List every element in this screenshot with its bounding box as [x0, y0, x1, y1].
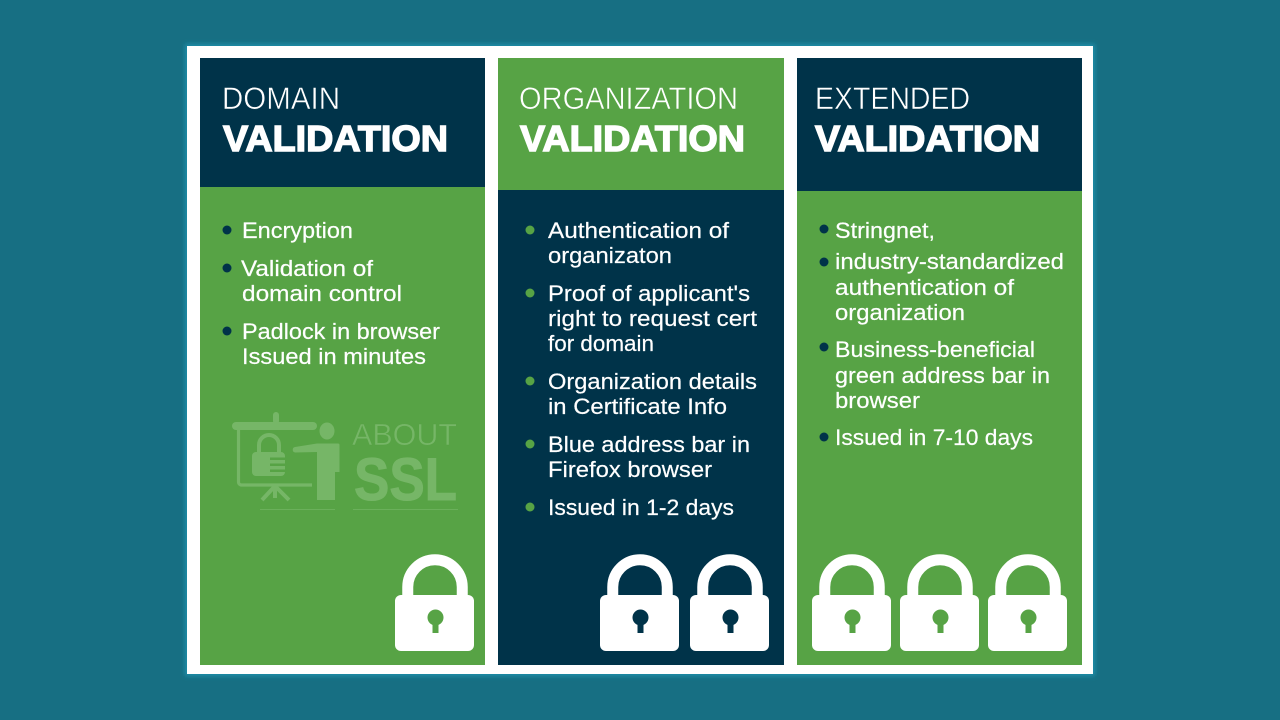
- feature list: organization validation: Authentication of: [548, 218, 730, 243]
- icon: padlock 3 of 3: [988, 560, 1067, 651]
- icon: presenter with padlock board: [232, 412, 340, 500]
- panel: extended validation: [797, 58, 1082, 665]
- feature list: organization validation: for domain: [548, 331, 654, 356]
- feature list: domain validation: [222, 218, 441, 369]
- feature list: organization validation: Issued in 1-2 days: [548, 495, 734, 520]
- feature list: domain validation: domain control: [242, 281, 402, 306]
- feature list: extended validation: Issued in 7-10 days: [835, 425, 1033, 450]
- panel: organization validation: [498, 58, 784, 665]
- icon: padlock 1 of 2: [600, 560, 679, 651]
- header: extended validation: VALIDATION: [815, 118, 1040, 159]
- header: organization validation: ORGANIZATION: [519, 80, 738, 116]
- feature list: extended validation: industry-standardized: [835, 249, 1064, 274]
- header: extended validation: EXTENDED: [815, 80, 970, 116]
- feature list: domain validation: Padlock in browser: [242, 319, 441, 344]
- white frame: [187, 46, 1093, 674]
- panel: domain validation: [200, 58, 485, 665]
- icon: padlock 1 of 3: [812, 560, 891, 651]
- feature list: organization validation: Proof of applicant's: [548, 281, 750, 306]
- logo text: ABOUT: [352, 417, 457, 452]
- header: domain validation: [200, 58, 485, 187]
- icon: padlock 2 of 3: [900, 560, 979, 651]
- watermark: about ssl logo: [232, 412, 458, 513]
- feature list: extended validation: browser: [835, 388, 921, 413]
- feature list: organization validation: right to request cert: [548, 306, 758, 331]
- feature list: extended validation: green address bar in: [835, 363, 1050, 388]
- icon: padlock 2 of 2: [690, 560, 769, 651]
- frame glow: [185, 44, 1095, 676]
- feature list: organization validation: organizaton: [548, 243, 672, 268]
- feature list: extended validation: [820, 218, 1064, 450]
- feature list: extended validation: authentication of: [835, 275, 1015, 300]
- header: organization validation: VALIDATION: [520, 118, 745, 159]
- header: domain validation: VALIDATION: [223, 118, 448, 159]
- feature list: extended validation: Business-beneficial: [835, 337, 1035, 362]
- feature list: organization validation: in Certificate Info: [548, 394, 727, 419]
- header: organization validation: [498, 58, 784, 190]
- feature list: domain validation: Validation of: [241, 256, 374, 281]
- feature list: domain validation: Encryption: [242, 218, 353, 243]
- watermark: about ssl logo: SSL: [354, 446, 457, 513]
- feature list: extended validation: organization: [835, 300, 965, 325]
- feature list: domain validation: Issued in minutes: [242, 344, 426, 369]
- feature list: organization validation: [526, 218, 758, 520]
- header: domain validation: DOMAIN: [222, 80, 340, 116]
- feature list: organization validation: Organization details: [548, 369, 757, 394]
- header: extended validation: [797, 58, 1082, 191]
- feature list: organization validation: Blue address bar in: [548, 432, 750, 457]
- icon: padlock: [395, 560, 474, 651]
- feature list: extended validation: Stringnet,: [835, 218, 935, 243]
- feature list: organization validation: Firefox browser: [548, 457, 713, 482]
